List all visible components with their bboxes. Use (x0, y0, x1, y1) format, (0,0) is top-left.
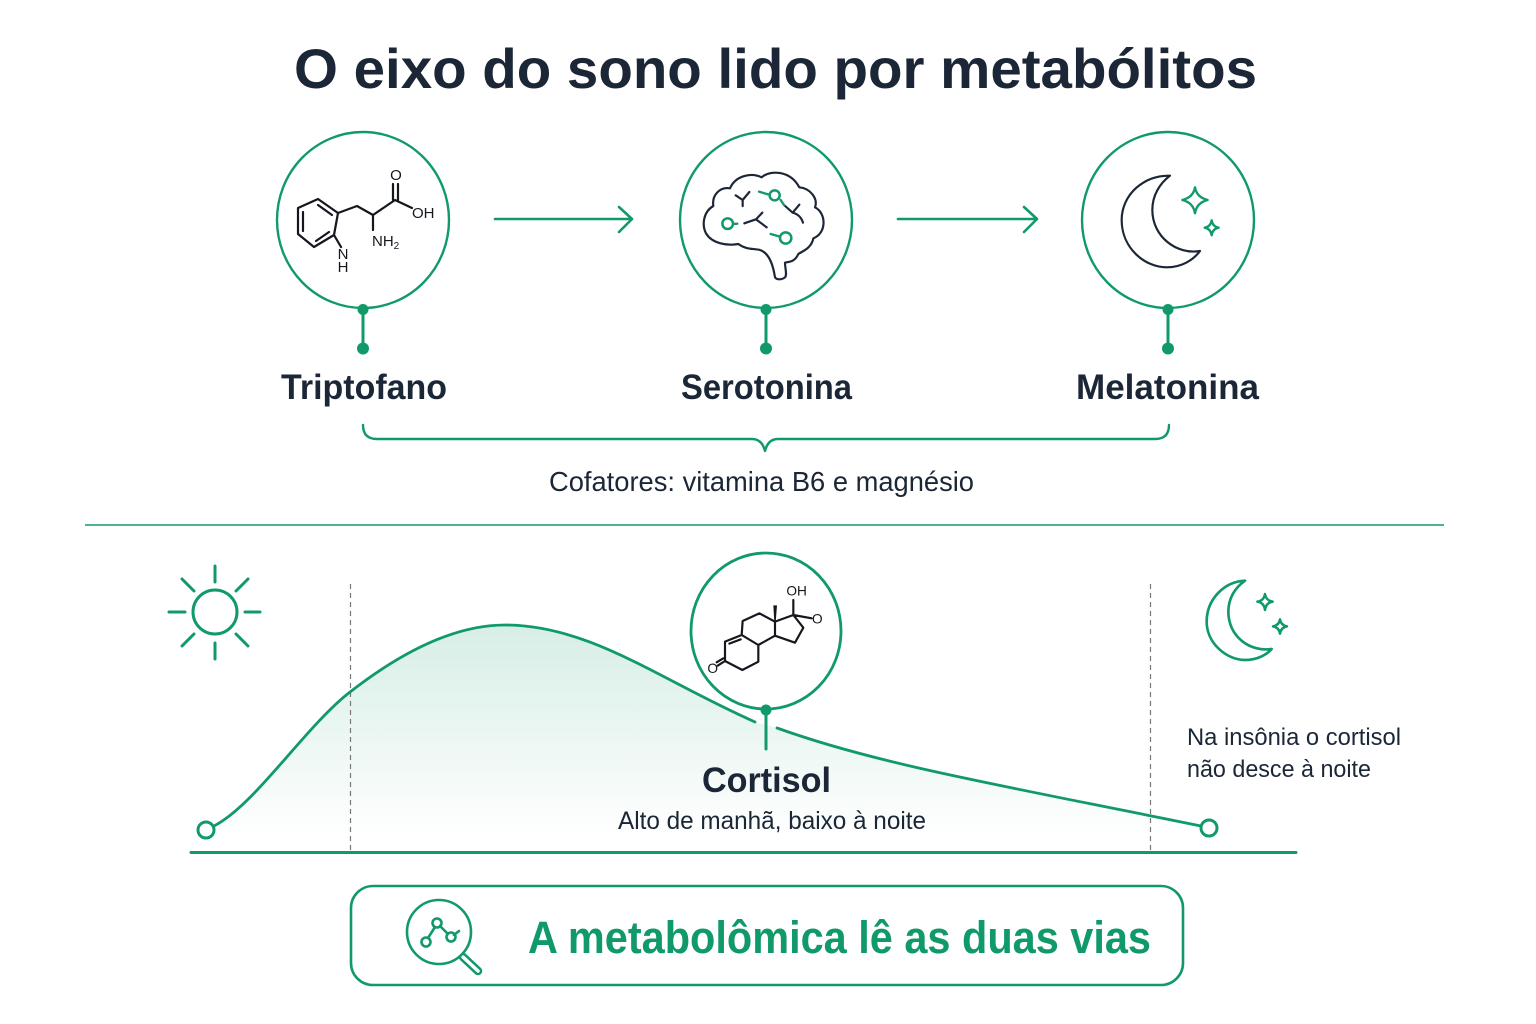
icon: cortisol molecule: O (707, 661, 718, 676)
label: Triptofano (281, 368, 447, 407)
icon: cortisol molecule: O (812, 611, 823, 626)
icon: moon and stars (1082, 132, 1254, 308)
insomnia note (1187, 724, 1401, 783)
connector pin (760, 704, 772, 749)
arrow (898, 207, 1037, 232)
connector pin (357, 304, 369, 354)
panel: pathway (277, 132, 1260, 497)
icon: night moon (1207, 581, 1287, 660)
label: Serotonina (681, 368, 852, 407)
arrow (495, 207, 632, 232)
icon: tryptophan molecule: 2 (394, 241, 400, 252)
bracket (363, 425, 1169, 451)
insomnia note: Na insônia o cortisol (1187, 724, 1401, 751)
connector pin (1162, 304, 1174, 354)
insomnia note: não desce à noite (1187, 756, 1371, 783)
icon: magnifier with graph (407, 900, 478, 971)
connector pin (760, 304, 772, 354)
node: Serotonina (680, 132, 852, 407)
icon: tryptophan molecule (277, 132, 449, 308)
cofactors caption: Cofatores: vitamina B6 e magnésio (549, 466, 974, 497)
cortisol label: Cortisol (702, 761, 831, 800)
icon: tryptophan molecule: OH (412, 205, 434, 222)
icon: tryptophan molecule: N (338, 246, 348, 263)
icon: tryptophan molecule: O (390, 167, 402, 184)
cortisol curve (198, 625, 1217, 838)
icon: tryptophan molecule: H (338, 259, 348, 276)
icon: brain (680, 132, 852, 308)
panel: cortisol chart (169, 553, 1401, 852)
axis (191, 851, 1296, 854)
node: Triptofano (277, 132, 449, 407)
node: Melatonina (1076, 132, 1260, 407)
callout text: A metabolômica lê as duas vias (528, 912, 1151, 963)
cortisol caption: Alto de manhã, baixo à noite (618, 807, 926, 835)
area under curve (206, 625, 1150, 852)
title: O eixo do sono lido por metabólitos (294, 37, 1257, 100)
icon: tryptophan molecule: NH (372, 233, 394, 250)
icon: sun (169, 566, 260, 659)
label: Melatonina (1076, 368, 1260, 407)
callout (351, 886, 1183, 985)
icon: cortisol molecule (691, 553, 841, 709)
icon: cortisol molecule: OH (786, 583, 807, 598)
